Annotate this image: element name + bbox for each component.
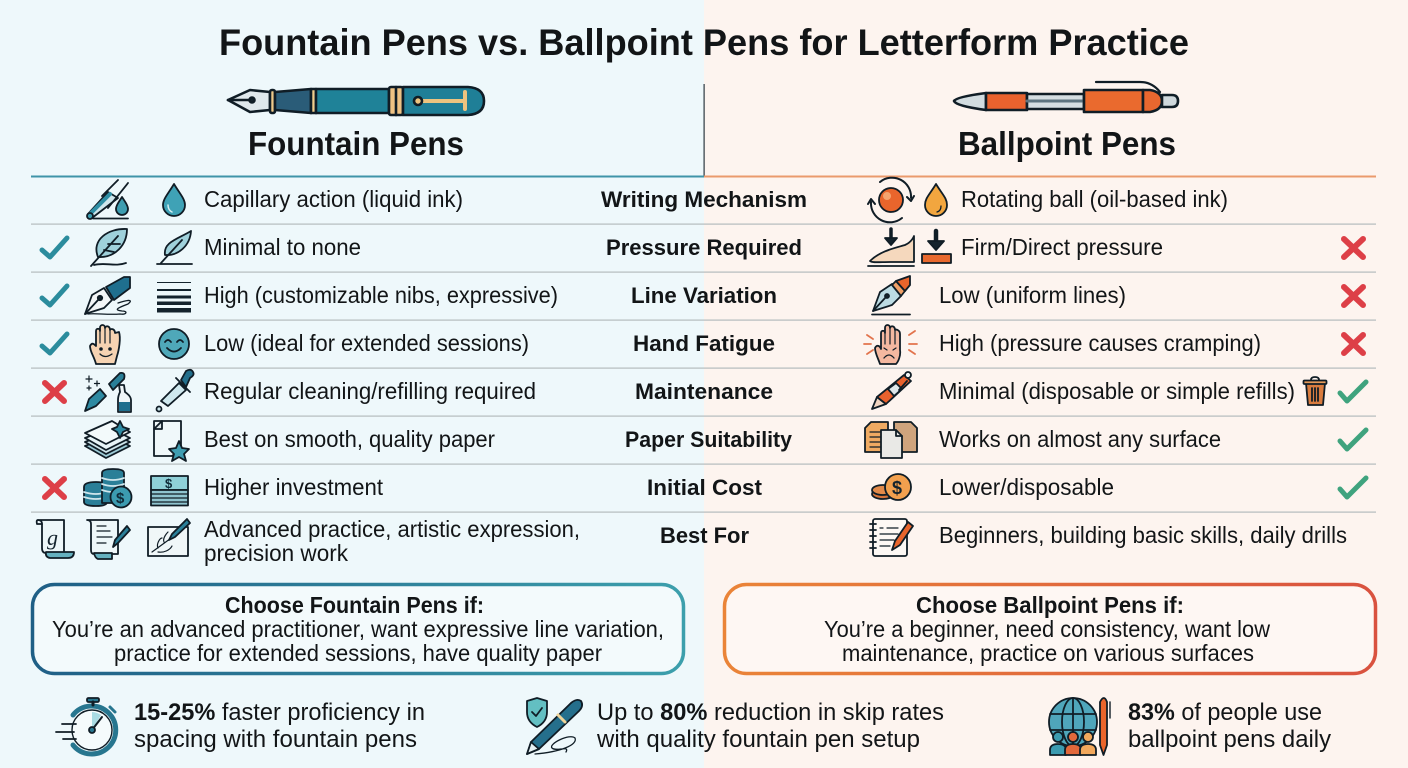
text: lower: Lower/disposable (939, 474, 1114, 500)
text: capillary: Capillary action (liquid ink) (204, 186, 463, 212)
label: hand fatigue: Hand Fatigue (633, 331, 775, 356)
stat text: 15-25% faster proficiency in (134, 699, 425, 726)
stat: skip rates (527, 698, 944, 754)
icon: notebook and pen (870, 519, 913, 556)
label: line variation: Line Variation (631, 283, 777, 308)
row: Maintenance (45, 370, 1366, 412)
panel text: You’re a beginner, need consistency, want low (824, 616, 1271, 642)
row: Best For (37, 516, 1347, 566)
icon: oil drop (925, 184, 947, 216)
stat: daily use (1049, 698, 1331, 755)
icon: feather on line (157, 231, 192, 264)
icon: hand pressing (868, 229, 914, 266)
label: maintenance: Maintenance (635, 379, 773, 404)
text: low: Low (uniform lines) (939, 282, 1126, 308)
text: minimal maintenance: Minimal (disposable or simple refills) (939, 378, 1295, 404)
panel heading: Choose Fountain Pens if: (225, 592, 484, 618)
text: advanced practice: precision work (204, 540, 348, 566)
heading: Ballpoint Pens: Ballpoint Pens (958, 125, 1176, 162)
icon: relaxed hand (90, 325, 120, 364)
label: best for: Best For (660, 523, 749, 548)
icon: dropper (156, 370, 194, 412)
icon: line weights (157, 282, 191, 312)
icon: cash stack: $ (165, 476, 173, 491)
icon: assorted papers (865, 422, 917, 458)
heading: Fountain Pens: Fountain Pens (248, 125, 464, 162)
label: pressure required: Pressure Required (606, 235, 802, 260)
row: Initial Cost (45, 469, 1366, 508)
check mark (42, 286, 67, 305)
icon: scroll with pen (87, 520, 130, 559)
panel text (824, 616, 1271, 666)
row: Paper Suitability (85, 421, 1366, 461)
text: advanced practice: Advanced practice, artistic expression, (204, 516, 580, 542)
panel heading: Choose Ballpoint Pens if: (916, 592, 1184, 618)
icon: scroll with flourish: g (47, 525, 58, 550)
stat text (596, 699, 944, 753)
panel: choose ballpoint pens (724, 584, 1376, 674)
check mark (1340, 430, 1366, 449)
icon: coin stacks: $ (116, 490, 125, 507)
icon: trash can (1304, 377, 1326, 405)
title: Fountain Pens vs. Ballpoint Pens for Letterform Practice (219, 21, 1189, 63)
icon: fountain pen and drop (87, 180, 128, 219)
panel text: practice for extended sessions, have quality paper (114, 640, 602, 666)
text: minimal: Minimal to none (204, 234, 361, 260)
table rules (31, 176, 1376, 513)
text: low fatigue: Low (ideal for extended sessions) (204, 330, 529, 356)
icon: globe, people and pen (1049, 698, 1110, 755)
check mark (1340, 478, 1366, 497)
check mark (1340, 382, 1366, 401)
icon: orange nib (872, 276, 910, 314)
text: rotating ball: Rotating ball (oil-based ink) (961, 186, 1228, 212)
stat text (134, 699, 425, 753)
text: higher investment: Higher investment (204, 474, 384, 500)
icon: coins (872, 474, 911, 500)
panel: choose fountain pens (32, 584, 684, 674)
text: works on: Works on almost any surface (939, 426, 1221, 452)
icon: ballpoint pen illustration (954, 82, 1178, 112)
icon: feather with line (91, 229, 127, 266)
row: Pressure Required (42, 229, 1363, 266)
icon: botanical sketch with pen (148, 519, 190, 556)
text: high: High (customizable nibs, expressive) (204, 282, 558, 308)
icon: rotating ball (868, 178, 914, 222)
stat text: with quality fountain pen setup (596, 726, 920, 753)
panel text: You’re an advanced practitioner, want expressive line variation, (52, 616, 664, 642)
text: advanced practice (204, 516, 580, 566)
stat text: spacing with fountain pens (134, 726, 417, 753)
stat text: Up to 80% reduction in skip rates (597, 699, 944, 726)
panel text (52, 616, 664, 666)
cross mark (1344, 239, 1363, 257)
stat text: 83% of people use (1128, 699, 1322, 726)
panel text: maintenance, practice on various surfaces (842, 640, 1254, 666)
row: Writing Mechanism (87, 178, 1228, 222)
icon: weight arrow (922, 231, 951, 263)
icon: paper stack (85, 421, 130, 458)
cross mark (45, 383, 64, 401)
icon: cramped hand (864, 325, 917, 364)
label: paper suitability: Paper Suitability (625, 427, 792, 452)
stat text: ballpoint pens daily (1128, 726, 1331, 753)
icon: coins: $ (892, 478, 902, 498)
icon: scroll with flourish (37, 520, 74, 558)
icon: fountain pen illustration (228, 87, 484, 115)
check mark (42, 334, 67, 353)
icon: pen and ink bottle (85, 373, 131, 412)
icon: shield and pen (527, 698, 582, 754)
icon: stopwatch (56, 698, 116, 754)
stat: faster proficiency (56, 698, 425, 754)
cross mark (1344, 335, 1363, 353)
text: regular cleaning: Regular cleaning/refilling required (204, 378, 536, 404)
row: Hand Fatigue (42, 325, 1363, 364)
text: best on smooth: Best on smooth, quality paper (204, 426, 495, 452)
icon: nib and swirl (85, 277, 130, 314)
row: Line Variation (42, 276, 1363, 314)
label: initial cost: Initial Cost (647, 475, 762, 500)
text: firm: Firm/Direct pressure (961, 234, 1163, 260)
cross mark (45, 479, 64, 497)
icon: ink drop (163, 184, 185, 216)
cross mark (1344, 287, 1363, 305)
header center divider (704, 84, 705, 176)
text: beginners: Beginners, building basic skills, daily drills (939, 522, 1347, 548)
label: writing mechanism: Writing Mechanism (601, 187, 807, 212)
text: high fatigue: High (pressure causes cramping) (939, 330, 1261, 356)
icon: document with star (154, 421, 189, 461)
icon: coin stacks (84, 469, 132, 508)
icon: click pen (872, 372, 911, 409)
icon: cash stack (151, 476, 188, 506)
stat text (1128, 699, 1331, 753)
check mark (42, 238, 67, 257)
icon: smile face (159, 329, 189, 359)
